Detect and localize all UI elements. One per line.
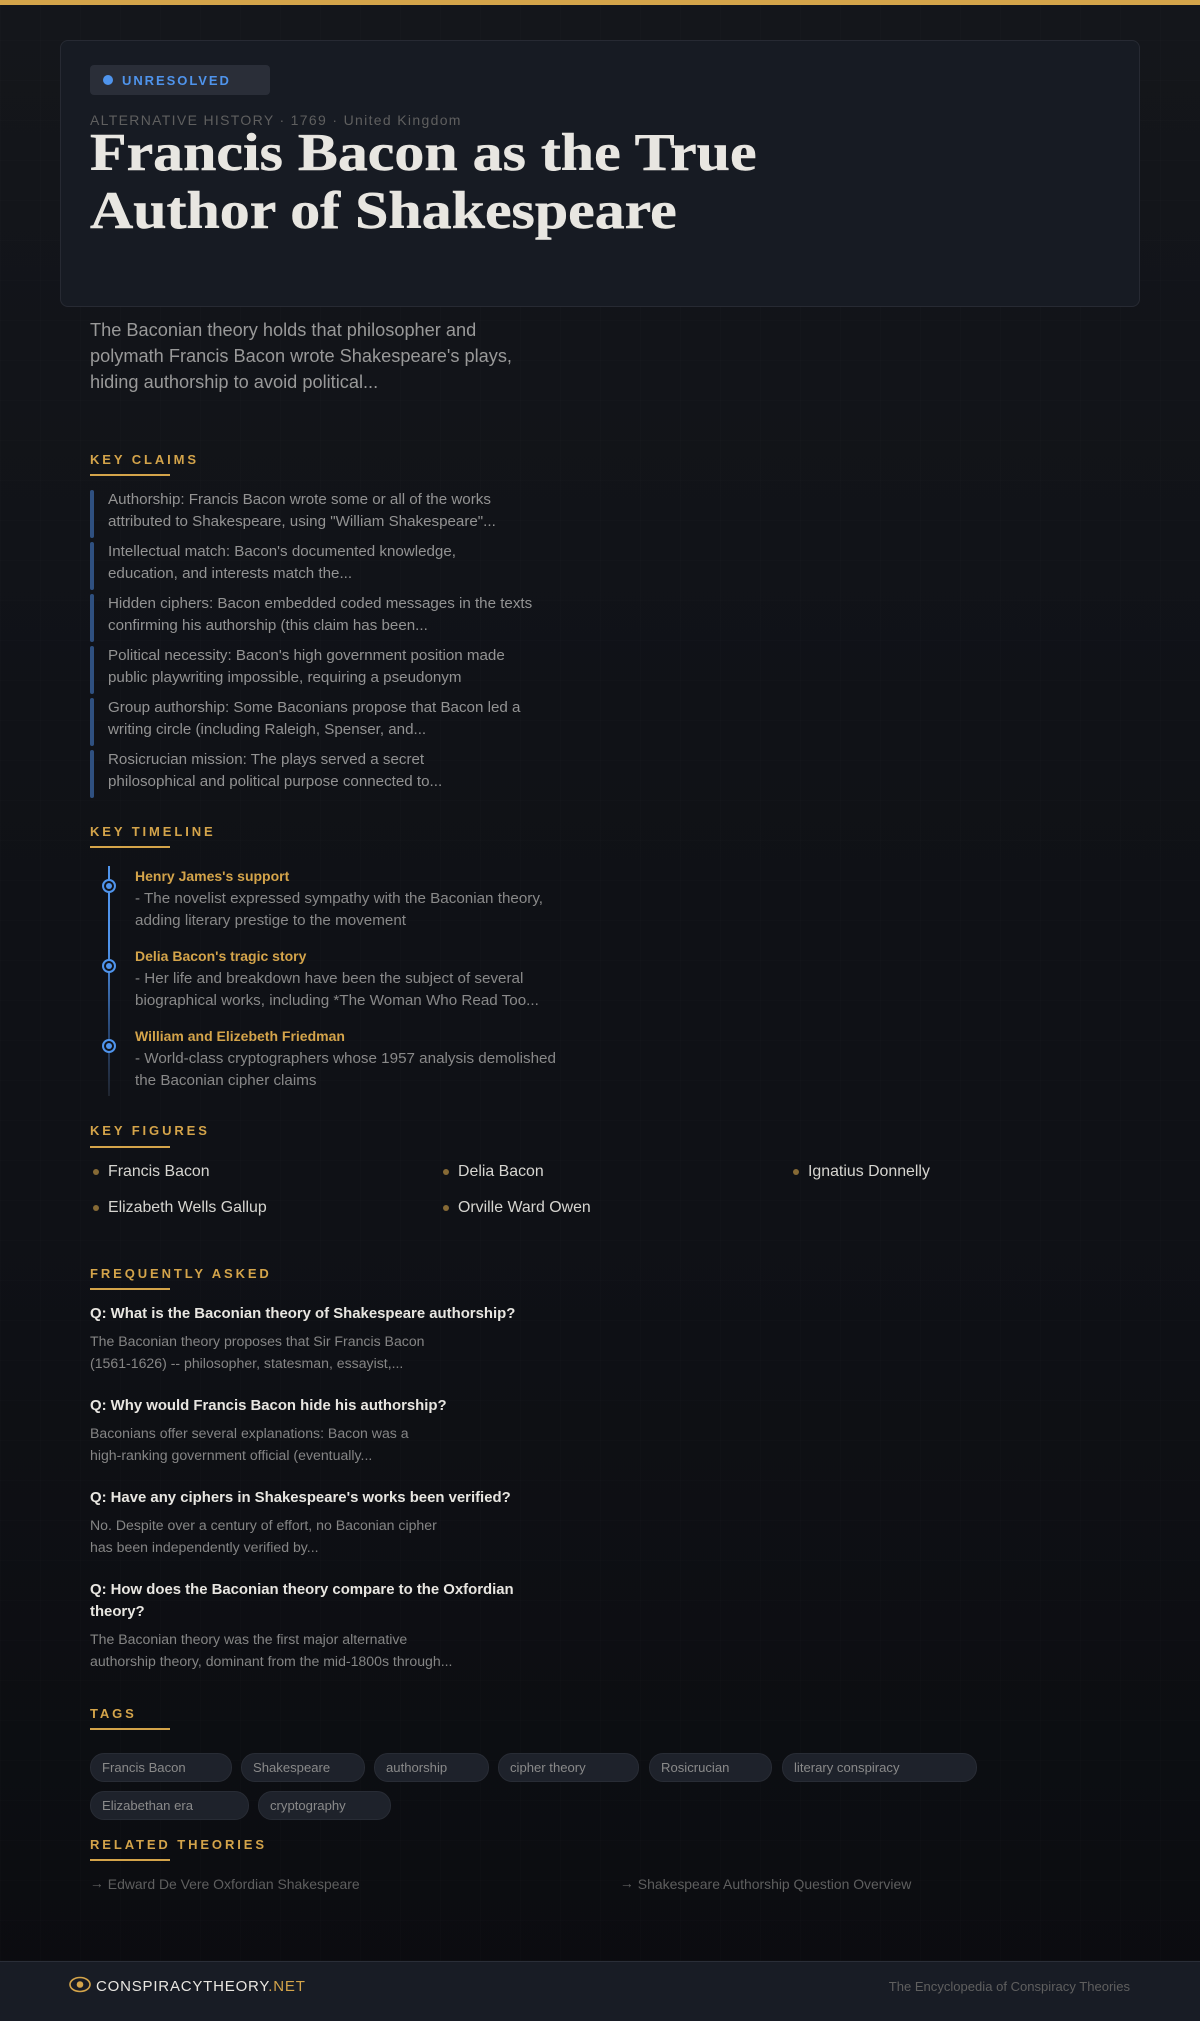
event: delia bacon: biographical works, including *The Woman Who Read Too... [135,992,539,1009]
faq 2: Baconians offer several explanations: Bacon was a [90,1425,409,1441]
faq 1: The Baconian theory proposes that Sir Francis Bacon [90,1333,425,1349]
tag: francis bacon: Francis Bacon [102,1760,186,1775]
faq 1: (1561-1626) -- philosopher, statesman, essayist,... [90,1355,403,1371]
tag: elizabethan era [90,1791,249,1820]
claim: authorship [90,490,496,538]
tag: cipher theory [498,1753,639,1782]
claim: political necessity: public playwriting impossible, requiring a pseudonym [108,669,461,686]
claim: authorship: Authorship: Francis Bacon wrote some or all of the works [108,491,491,508]
event: delia bacon: - Her life and breakdown have been the subject of several [135,970,523,987]
claim: rosicrucian mission: philosophical and political purpose connected to... [108,773,442,790]
faq 1: Q: What is the Baconian theory of Shakespeare authorship? [90,1306,515,1322]
faq 1 [90,1306,515,1371]
event: henry james: Henry James's support [135,868,289,884]
tag: literary conspiracy: literary conspiracy [794,1760,900,1775]
panel: key timeline [90,824,556,1096]
claim: group authorship: writing circle (including Raleigh, Spenser, and... [108,721,426,738]
figure: delia bacon: Delia Bacon [458,1163,544,1180]
event: friedmans: William and Elizebeth Friedman [135,1028,345,1044]
event: friedmans [102,1028,556,1089]
heading: key figures: KEY FIGURES [90,1123,210,1138]
figure: elizabeth wells gallup: Elizabeth Wells Gallup [108,1199,267,1216]
heading: related theories: RELATED THEORIES [90,1837,267,1852]
tag: authorship [374,1753,489,1782]
tag: francis bacon [90,1753,232,1782]
panel: frequently asked [90,1266,515,1669]
event: delia bacon [102,948,539,1009]
intro text [90,320,512,392]
claim: rosicrucian mission: Rosicrucian mission: The plays served a secret [108,751,424,768]
footer tagline: The Encyclopedia of Conspiracy Theories [889,1979,1130,1994]
badge label: UNRESOLVED [122,72,231,88]
figure: ignatius donnelly: Ignatius Donnelly [808,1163,930,1180]
status badge: unresolved [90,65,270,95]
claim: group authorship: Group authorship: Some Baconians propose that Bacon led a [108,699,520,716]
tag: cipher theory: cipher theory [510,1760,586,1775]
heading: frequently asked: FREQUENTLY ASKED [90,1266,272,1281]
claim: authorship: attributed to Shakespeare, using "William Shakespeare"... [108,513,496,530]
intro text: hiding authorship to avoid political... [90,372,378,392]
event: henry james: - The novelist expressed sympathy with the Baconian theory, [135,890,543,907]
panel: related theories [90,1837,912,1892]
footer [0,1961,1200,2021]
claim: hidden ciphers: Hidden ciphers: Bacon embedded coded messages in the texts [108,595,532,612]
claim: political necessity: Political necessity: Bacon's high government position made [108,647,505,664]
event: friedmans: - World-class cryptographers whose 1957 analysis demolished [135,1050,556,1067]
faq 3: Q: Have any ciphers in Shakespeare's works been verified? [90,1490,511,1506]
tag: rosicrucian [649,1753,772,1782]
faq 4: theory? [90,1604,145,1620]
panel: header card [60,40,1140,307]
faq 4: authorship theory, dominant from the mid-1800s through... [90,1653,452,1669]
faq 2 [90,1398,447,1463]
title [90,124,757,240]
claim: intellectual match: Intellectual match: Bacon's documented knowledge, [108,543,456,560]
faq 4: The Baconian theory was the first major alternative [90,1631,407,1647]
claim: intellectual match: education, and interests match the... [108,565,352,582]
faq 4 [90,1582,514,1669]
tag: cryptography [258,1791,391,1820]
claim: hidden ciphers: confirming his authorship (this claim has been... [108,617,428,634]
icon: status dot [103,75,113,85]
tag: shakespeare [241,1753,365,1782]
top accent bar [0,0,1200,5]
panel: key figures [90,1123,930,1216]
link: authorship question: → Shakespeare Authorship Question Overview [620,1875,911,1892]
claim: political necessity [90,646,505,694]
tag: rosicrucian: Rosicrucian [661,1760,729,1775]
panel: tags [90,1706,977,1820]
tag: authorship: authorship [386,1760,447,1775]
category meta line: ALTERNATIVE HISTORY · 1769 · United Kingdom [90,112,462,128]
figure: orville ward owen: Orville Ward Owen [458,1199,591,1216]
tag: shakespeare: Shakespeare [253,1760,330,1775]
faq 4: Q: How does the Baconian theory compare to the Oxfordian [90,1582,514,1598]
claim: intellectual match [90,542,456,590]
intro text: polymath Francis Bacon wrote Shakespeare's plays, [90,346,512,366]
heading: key timeline: KEY TIMELINE [90,824,216,839]
title: Francis Bacon as the True [90,124,757,182]
panel: key claims [90,452,532,798]
link: edward de vere: → Edward De Vere Oxfordian Shakespeare [90,1875,360,1892]
event: friedmans: the Baconian cipher claims [135,1072,317,1089]
event: henry james: adding literary prestige to the movement [135,912,406,929]
heading: key claims: KEY CLAIMS [90,452,199,467]
claim: rosicrucian mission [90,750,442,798]
tag: elizabethan era: Elizabethan era [102,1798,193,1813]
event: delia bacon: Delia Bacon's tragic story [135,948,306,964]
claim: hidden ciphers [90,594,532,642]
heading: tags: TAGS [90,1706,137,1721]
faq 2: high-ranking government official (eventually... [90,1447,372,1463]
icon: eye logo [69,1976,91,1992]
claim: group authorship [90,698,520,746]
faq 3: No. Despite over a century of effort, no Baconian cipher [90,1517,437,1533]
timeline line [108,866,110,1096]
event: henry james [102,868,543,929]
tag: cryptography: cryptography [270,1798,346,1813]
title: Author of Shakespeare [90,182,677,240]
faq 2: Q: Why would Francis Bacon hide his authorship? [90,1398,447,1414]
figure: francis bacon: Francis Bacon [108,1163,210,1180]
tag: literary conspiracy [782,1753,977,1782]
intro text: The Baconian theory holds that philosopher and [90,320,476,340]
faq 3 [90,1490,511,1555]
faq 3: has been independently verified by... [90,1539,319,1555]
logo wordmark: CONSPIRACYTHEORY.NET [96,1978,306,1995]
